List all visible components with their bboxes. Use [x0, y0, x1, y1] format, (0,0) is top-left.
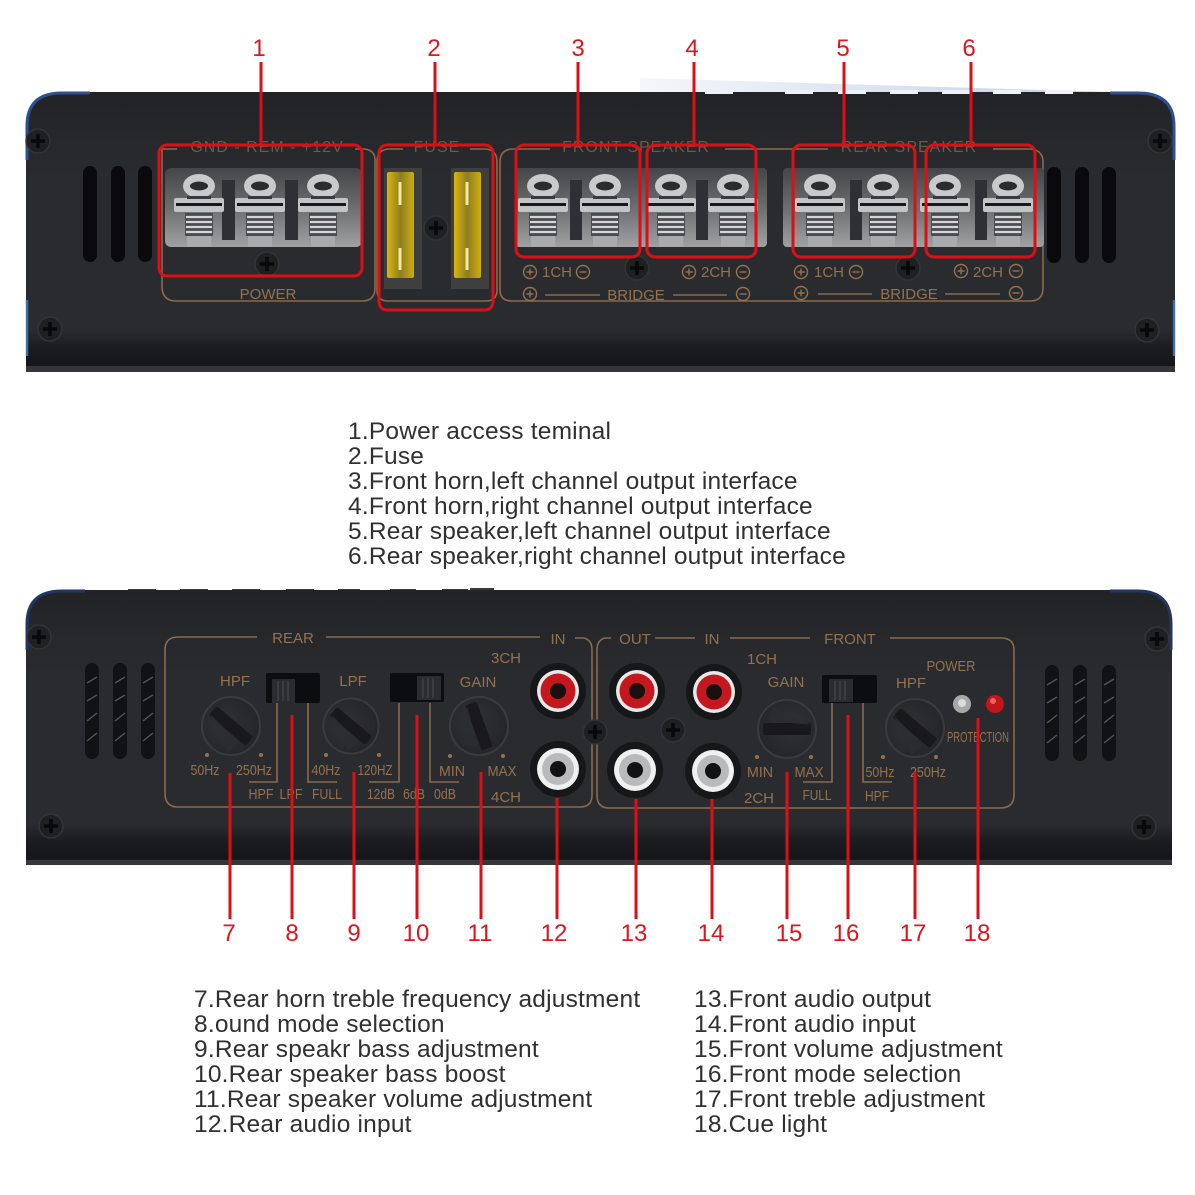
section titles: GND - REM - +12V	[190, 139, 344, 156]
RCA sockets	[530, 663, 742, 799]
silkscreen labels: 50Hz	[190, 762, 220, 779]
silkscreen labels: 120HZ	[358, 762, 392, 779]
callout numbers: bottom panel: 7	[222, 920, 236, 947]
silkscreen labels: GAIN	[768, 674, 804, 691]
silkscreen labels: 12dB	[367, 786, 395, 803]
LED: power	[953, 695, 971, 713]
text block: legend 13 to 18: 17.Front treble adjustment	[694, 1086, 985, 1113]
callout numbers: bottom panel	[222, 920, 990, 947]
text block: legend 13 to 18: 18.Cue light	[694, 1111, 827, 1138]
silkscreen labels: HPF	[896, 675, 926, 692]
callout numbers: top panel: 5	[836, 35, 850, 62]
text block: legend 13 to 18: 14.Front audio input	[694, 1011, 916, 1038]
fuse: right	[451, 168, 489, 289]
text block: legend 7 to 12: 11.Rear speaker volume adjustment	[194, 1086, 592, 1113]
text block: legend 7 to 12: 9.Rear speakr bass adjustment	[194, 1036, 539, 1063]
callout numbers: top panel: 4	[685, 35, 699, 62]
corner screws	[26, 129, 1172, 342]
switch: rear bass boost	[390, 673, 444, 702]
terminal: front speaker block	[515, 168, 767, 247]
callout numbers: bottom panel: 16	[833, 920, 859, 947]
silkscreen labels: FRONT	[824, 631, 876, 648]
silkscreen labels: 1CH	[814, 264, 844, 281]
callout numbers: bottom panel: 13	[621, 920, 647, 947]
text block: legend 1 to 6: 2.Fuse	[348, 443, 424, 470]
silkscreen labels: GAIN	[460, 674, 496, 691]
section titles: FRONT SPEAKER	[562, 139, 710, 156]
callout numbers: top panel	[252, 35, 976, 62]
text block: legend 7 to 12: 12.Rear audio input	[194, 1111, 412, 1138]
silkscreen outlines	[162, 149, 1043, 301]
silkscreen labels: 250Hz	[910, 764, 946, 781]
silkscreen labels: IN	[550, 631, 566, 648]
vents: left	[83, 166, 152, 262]
silkscreen labels: FULL	[802, 787, 832, 804]
text block: legend 1 to 6: 6.Rear speaker,right channel output interface	[348, 543, 846, 570]
silkscreen labels: 1CH	[542, 264, 572, 281]
silkscreen labels: LPF	[280, 786, 302, 803]
callout lines and boxes: top panel	[159, 62, 1035, 310]
switch: front mode	[822, 675, 877, 703]
silkscreen labels: OUT	[619, 631, 651, 648]
terminal: power block	[165, 168, 362, 247]
silkscreen labels: MIN	[439, 763, 465, 780]
silkscreen labels: 4CH	[491, 789, 521, 806]
silkscreen labels: BRIDGE	[607, 287, 665, 304]
panel: bottom amplifier control face	[26, 588, 1172, 865]
text block: legend 13 to 18	[694, 986, 1003, 1138]
text block: legend 7 to 12	[194, 986, 640, 1138]
silkscreen labels: MAX	[794, 764, 824, 781]
text block: legend 13 to 18: 16.Front mode selection	[694, 1061, 961, 1088]
text block: legend 1 to 6: 4.Front horn,right channel output interface	[348, 493, 813, 520]
callout numbers: bottom panel: 10	[403, 920, 429, 947]
callout numbers: top panel: 2	[427, 35, 441, 62]
silkscreen labels: 250Hz	[236, 762, 272, 779]
silkscreen labels: 2CH	[744, 790, 774, 807]
silkscreen labels: HPF	[248, 786, 274, 803]
silkscreen labels: POWER	[240, 286, 296, 303]
knob: rear HPF	[190, 685, 272, 767]
silkscreen labels: 2CH	[973, 264, 1003, 281]
corner screws	[27, 625, 1169, 839]
silkscreen labels	[190, 630, 1009, 807]
silkscreen labels: 40Hz	[312, 762, 340, 779]
silkscreen labels	[240, 264, 1022, 304]
silkscreen labels: MIN	[747, 764, 773, 781]
callout numbers: bottom panel: 17	[900, 920, 926, 947]
panel: top amplifier terminal face	[26, 78, 1175, 372]
vents: right	[1047, 167, 1116, 263]
callout numbers: top panel: 6	[962, 35, 976, 62]
silkscreen labels: 6dB	[403, 786, 425, 803]
terminal: rear speaker block	[783, 168, 1044, 247]
silkscreen labels: 1CH	[747, 651, 777, 668]
text block: legend 1 to 6: 3.Front horn,left channel output interface	[348, 468, 798, 495]
callout numbers: bottom panel: 14	[698, 920, 724, 947]
silkscreen labels: REAR	[272, 630, 314, 647]
text block: legend 13 to 18: 13.Front audio output	[694, 986, 931, 1013]
silkscreen labels: IN	[704, 631, 720, 648]
text block: legend 13 to 18: 15.Front volume adjustment	[694, 1036, 1003, 1063]
indicator dots	[205, 753, 938, 759]
knob: rear gain	[442, 689, 516, 763]
switch: rear HPF/LPF	[266, 673, 320, 703]
text block: legend 7 to 12: 10.Rear speaker bass boost	[194, 1061, 506, 1088]
silkscreen labels: BRIDGE	[880, 286, 938, 303]
silkscreen labels: 50Hz	[866, 764, 894, 781]
knob: front gain	[758, 700, 816, 758]
centre screws	[583, 718, 685, 744]
knob: front HPF	[874, 687, 956, 769]
text block: legend 7 to 12: 8.ound mode selection	[194, 1011, 445, 1038]
silkscreen labels: 3CH	[491, 650, 521, 667]
callout numbers: bottom panel: 12	[541, 920, 567, 947]
silkscreen labels: FULL	[312, 786, 342, 803]
silkscreen labels: 0dB	[434, 786, 456, 803]
callout numbers: top panel: 1	[252, 35, 266, 62]
silkscreen labels: HPF	[865, 788, 889, 805]
text block: legend 7 to 12: 7.Rear horn treble frequency adjustment	[194, 986, 640, 1013]
knob: rear LPF	[312, 687, 390, 765]
text block: legend 1 to 6: 5.Rear speaker,left channel output interface	[348, 518, 831, 545]
callout numbers: bottom panel: 18	[964, 920, 990, 947]
silkscreen labels: HPF	[220, 673, 250, 690]
callout lines: bottom panel	[230, 715, 978, 919]
vents: left	[85, 663, 155, 759]
section titles: REAR SPEAKER	[841, 139, 977, 156]
text block: legend 1 to 6: 1.Power access teminal	[348, 418, 611, 445]
callout numbers: bottom panel: 8	[285, 920, 299, 947]
callout numbers: bottom panel: 15	[776, 920, 802, 947]
silkscreen labels: 2CH	[701, 264, 731, 281]
callout numbers: bottom panel: 11	[468, 920, 492, 947]
text block: legend 1 to 6	[348, 418, 846, 570]
callout numbers: bottom panel: 9	[347, 920, 361, 947]
silkscreen labels: PROTECTION	[947, 729, 1009, 746]
LED: protection	[986, 695, 1004, 713]
silkscreen labels: LPF	[339, 673, 367, 690]
fuse: left	[384, 168, 422, 289]
callout numbers: top panel: 3	[571, 35, 585, 62]
silkscreen labels: POWER	[926, 658, 976, 675]
section titles: FUSE	[414, 139, 460, 156]
section titles	[190, 139, 977, 156]
mounting screws	[255, 216, 920, 280]
vents: right	[1045, 665, 1116, 761]
silkscreen labels: MAX	[488, 763, 516, 780]
silkscreen outlines	[165, 637, 1014, 808]
